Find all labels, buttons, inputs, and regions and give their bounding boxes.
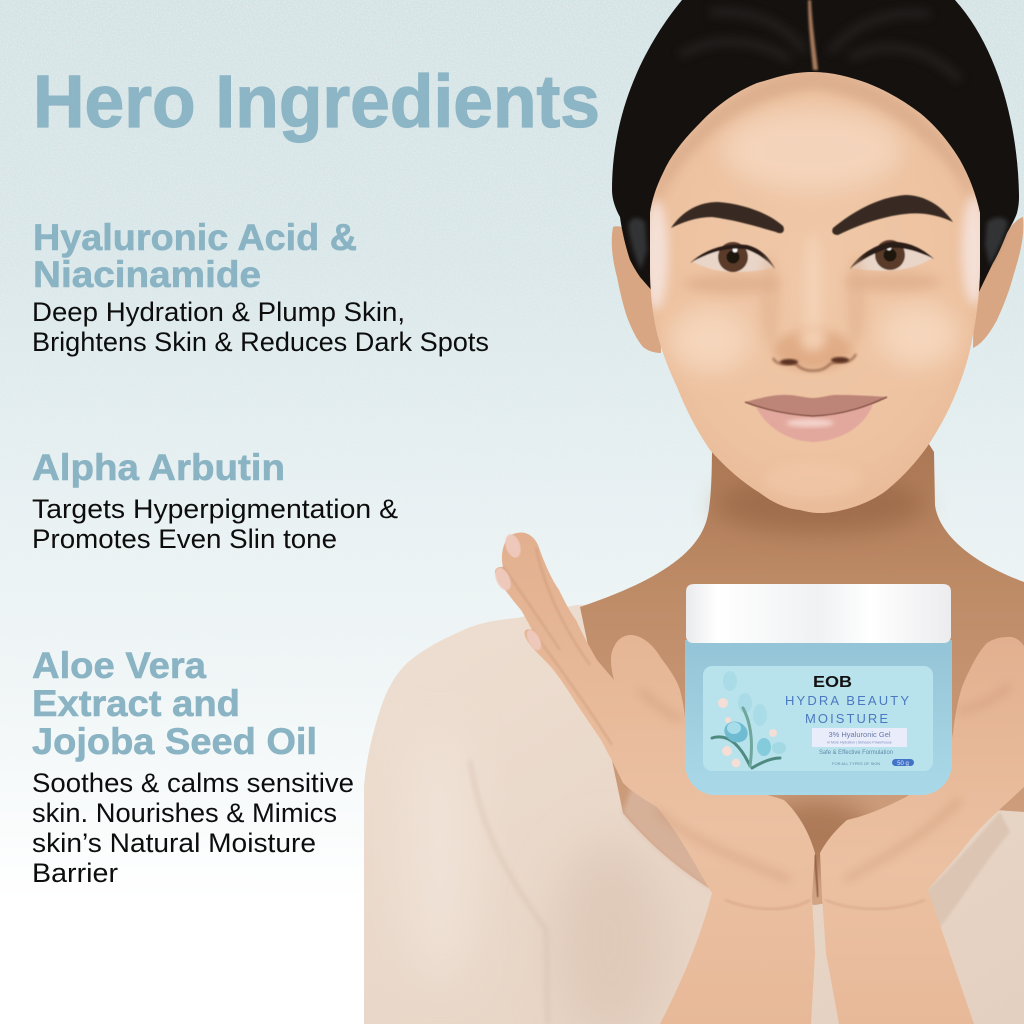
ingredient box: In More Hydration | Skincare Powerhouse bbox=[827, 740, 892, 744]
chest and neck bbox=[580, 430, 1024, 905]
text: hyaluronic benefits: Brightens Skin & Reduces Dark Spots bbox=[32, 327, 489, 357]
heading: aloe vera and jojoba: Jojoba Seed Oil bbox=[32, 721, 317, 762]
jar label bbox=[703, 666, 933, 771]
panel: alpha arbutin bbox=[32, 447, 398, 554]
weight pill bbox=[892, 759, 914, 767]
text: hyaluronic benefits bbox=[32, 297, 489, 357]
ingredient box bbox=[812, 728, 907, 747]
left hand bbox=[495, 533, 815, 1024]
eyes bbox=[690, 240, 934, 272]
product name: HYDRA BEAUTY bbox=[785, 693, 909, 708]
weight pill: 50 g bbox=[897, 761, 909, 767]
text: aloe vera benefits bbox=[32, 768, 354, 888]
eyebrows bbox=[671, 195, 953, 235]
flowers bbox=[712, 671, 786, 768]
ears bbox=[612, 217, 1023, 353]
panel: aloe vera and jojoba bbox=[32, 645, 354, 888]
brand logo: EOB bbox=[813, 674, 852, 691]
lips bbox=[745, 395, 887, 442]
heading: hyaluronic acid: Hyaluronic Acid & bbox=[33, 217, 357, 258]
panel: hyaluronic acid and niacinamide bbox=[32, 217, 489, 357]
heading: aloe vera and jojoba: Extract and bbox=[32, 683, 240, 724]
text: alpha arbutin benefits bbox=[32, 494, 398, 554]
ingredient box: 3% Hyaluronic Gel bbox=[828, 730, 891, 739]
product jar bbox=[685, 584, 952, 795]
text: alpha arbutin benefits: Targets Hyperpigmentation & bbox=[32, 494, 398, 524]
product name: MOISTURE bbox=[805, 711, 888, 726]
jar lid bbox=[686, 584, 951, 643]
fingernails bbox=[492, 532, 544, 652]
text: hyaluronic benefits: Deep Hydration & Plump Skin, bbox=[32, 297, 405, 327]
text: alpha arbutin benefits: Promotes Even Slin tone bbox=[32, 524, 337, 554]
text: aloe vera benefits: Soothes & calms sensitive bbox=[32, 768, 354, 798]
nose bbox=[760, 235, 866, 371]
heading: alpha arbutin: Alpha Arbutin bbox=[32, 447, 285, 488]
hair bbox=[612, 0, 1019, 300]
jar body bbox=[685, 640, 952, 795]
title: Hero Ingredients bbox=[33, 60, 600, 143]
text: aloe vera benefits: skin’s Natural Moisture bbox=[32, 828, 316, 858]
face bbox=[644, 68, 986, 513]
product name bbox=[785, 693, 909, 726]
illustration: woman holding jar bbox=[364, 0, 1024, 1024]
text: aloe vera benefits: Barrier bbox=[32, 858, 118, 888]
heading: aloe vera and jojoba: Aloe Vera bbox=[32, 645, 206, 686]
hands bbox=[492, 532, 1024, 1024]
background bbox=[0, 0, 1024, 796]
heading: hyaluronic acid bbox=[33, 217, 357, 295]
heading: hyaluronic acid: Niacinamide bbox=[33, 254, 261, 295]
blouse bbox=[364, 600, 1024, 1024]
heading: aloe vera and jojoba bbox=[32, 645, 317, 762]
text: aloe vera benefits: skin. Nourishes & Mimics bbox=[32, 798, 337, 828]
right hand bbox=[820, 637, 1024, 1024]
tagline: Safe & Effective Formulation bbox=[819, 750, 893, 756]
skin type text: FOR ALL TYPES OF SKIN bbox=[832, 761, 880, 766]
